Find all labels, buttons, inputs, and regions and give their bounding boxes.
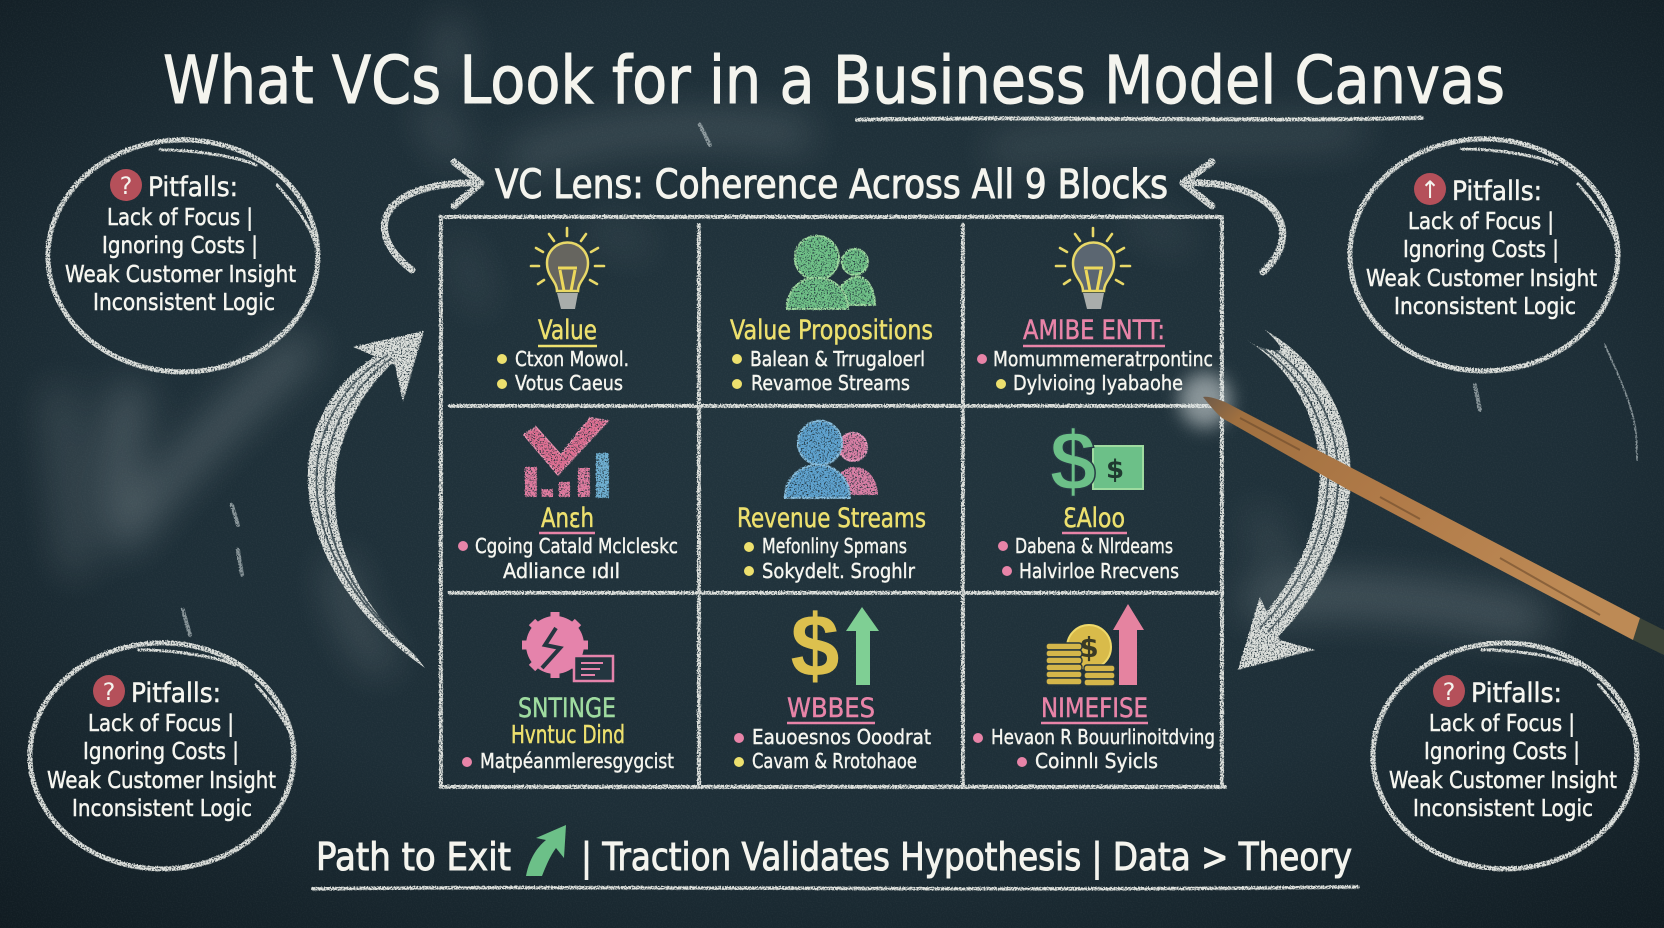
cell: amibe entt bbox=[977, 228, 1213, 395]
icon: coins and pink arrow: $ bbox=[1079, 631, 1099, 664]
callout: pitfalls bottom left bbox=[30, 643, 295, 869]
pitfalls text: Ignoring Costs | bbox=[1403, 237, 1559, 263]
pitfalls text: Ignoring Costs | bbox=[83, 739, 239, 765]
pitfalls text: Lack of Focus | bbox=[88, 711, 234, 737]
icon: up arrow mark bbox=[1414, 173, 1446, 205]
icon: dollar and bill bbox=[1050, 414, 1143, 508]
pitfalls text: Inconsistent Logic bbox=[1394, 294, 1576, 320]
cell: anch bbox=[458, 418, 678, 583]
bullets: Dylvioing Iyabaohe bbox=[1013, 371, 1183, 395]
icon: question mark bbox=[93, 675, 125, 707]
icon: blue and pink people bbox=[785, 421, 878, 498]
bullets bbox=[497, 347, 629, 395]
arrow: top left curved bbox=[385, 162, 481, 270]
bottom tagline: Path to Exit bbox=[316, 835, 511, 879]
pitfalls text: Ignoring Costs | bbox=[102, 233, 258, 259]
bullets: Balean & Trrugaloerl bbox=[750, 347, 925, 371]
icon: question mark: ? bbox=[103, 678, 115, 706]
subtitle: VC Lens: VC Lens: Coherence Across All 9 Blocks bbox=[495, 162, 1168, 208]
pitfalls text: Pitfalls: bbox=[1471, 678, 1562, 709]
bullets: Votus Caeus bbox=[515, 371, 623, 395]
pitfalls text bbox=[1389, 678, 1617, 822]
cell: wbbes bbox=[734, 596, 931, 773]
icon: dollar and green arrow bbox=[791, 596, 879, 695]
bullets: Cgoing Catald Mclcleskc bbox=[475, 534, 678, 558]
callout: pitfalls top left bbox=[48, 140, 318, 372]
pitfalls text: Pitfalls: bbox=[1452, 176, 1542, 207]
pitfalls text: Lack of Focus | bbox=[1429, 711, 1575, 737]
bullets: Revamoe Streams bbox=[751, 371, 910, 395]
bullets: Cavam & Rrotohaoe bbox=[752, 749, 917, 773]
icon: gear with document bbox=[522, 612, 613, 681]
pitfalls text: Weak Customer Insight bbox=[47, 768, 276, 794]
cell: value bbox=[497, 228, 629, 395]
pointer stick bbox=[1179, 372, 1664, 655]
heading: WBBES bbox=[787, 693, 875, 724]
bottom tagline bbox=[313, 825, 1358, 889]
canvas grid lines bbox=[441, 217, 1225, 787]
cell: ealoo bbox=[998, 414, 1179, 583]
pitfalls text bbox=[1366, 176, 1597, 320]
icon: question mark bbox=[1433, 675, 1465, 707]
cell: nimefise bbox=[973, 604, 1215, 773]
callout: pitfalls bottom right bbox=[1373, 643, 1638, 869]
cell: value propositions bbox=[730, 236, 933, 395]
pitfalls text: Weak Customer Insight bbox=[65, 262, 296, 288]
icon: chart with check bbox=[524, 418, 609, 498]
bullets bbox=[732, 347, 925, 395]
icon: question mark: ? bbox=[120, 172, 132, 200]
heading: AMIBE ENTT: bbox=[1023, 315, 1165, 346]
cell: revenue streams bbox=[737, 421, 926, 583]
heading: Anɛh bbox=[541, 503, 594, 534]
heading: SNTINGE bbox=[518, 693, 616, 724]
pitfalls text: Lack of Focus | bbox=[107, 205, 253, 231]
subheading: Hvntuc Dind bbox=[511, 720, 625, 749]
pitfalls text: Inconsistent Logic bbox=[1413, 796, 1593, 822]
pitfalls text: Inconsistent Logic bbox=[72, 796, 252, 822]
pitfalls text: Weak Customer Insight bbox=[1366, 266, 1597, 292]
icon: question mark bbox=[110, 169, 142, 201]
icon: question mark: ? bbox=[1443, 678, 1455, 706]
bullets bbox=[744, 534, 916, 583]
arrow: top right curved bbox=[1183, 162, 1283, 272]
pitfalls text: Lack of Focus | bbox=[1408, 209, 1554, 235]
heading: Value Propositions bbox=[730, 315, 933, 346]
bullets: Ctxon Mowol. bbox=[515, 347, 629, 371]
pitfalls text: Weak Customer Insight bbox=[1389, 768, 1617, 794]
pitfalls text bbox=[47, 678, 276, 822]
bullets: Hevaon R Bouurlinoitdving bbox=[991, 725, 1215, 749]
arrow: large right downward bbox=[1238, 330, 1351, 670]
callout: pitfalls top right bbox=[1350, 139, 1618, 371]
bullets bbox=[998, 534, 1179, 583]
heading: Value bbox=[538, 315, 597, 346]
bullets bbox=[973, 725, 1215, 773]
heading: ƐAloo bbox=[1063, 503, 1125, 534]
arrow: large left upward bbox=[308, 331, 425, 668]
bullets: Eauoesnos Ooodrat bbox=[752, 725, 931, 749]
bullets: Adliance ıdıl bbox=[503, 559, 620, 583]
pitfalls text: Ignoring Costs | bbox=[1424, 739, 1580, 765]
bullets bbox=[458, 534, 678, 583]
bullet: Matpéanmleresgygcist bbox=[480, 749, 674, 773]
heading: NIMEFISE bbox=[1041, 693, 1148, 724]
icon: light bulb bbox=[531, 228, 604, 309]
icon: dollar and bill: $ bbox=[1050, 414, 1096, 508]
bullets bbox=[977, 347, 1213, 395]
title: What VCs Look for in a Business Model Canvas bbox=[163, 42, 1505, 119]
pitfalls text: Pitfalls: bbox=[148, 172, 238, 203]
icon: green people bbox=[787, 236, 875, 309]
bullets: Momummemeratrpontinc bbox=[993, 347, 1213, 371]
bottom tagline: | Traction Validates Hypothesis | Data > Theory bbox=[581, 835, 1352, 880]
bullets: Halvirloe Rrecvens bbox=[1019, 559, 1179, 583]
bullets: Coinnlı Syicls bbox=[1035, 749, 1158, 773]
heading: Revenue Streams bbox=[737, 503, 926, 534]
icon: green arrow bbox=[526, 825, 566, 876]
bullets: Sokydelt. Sroghlr bbox=[762, 559, 916, 583]
icon: dollar and green arrow: $ bbox=[791, 596, 839, 695]
bullets: Mefonliny Spmans bbox=[762, 534, 907, 558]
bullets bbox=[734, 725, 931, 773]
pitfalls text bbox=[65, 172, 296, 316]
pitfalls text: Inconsistent Logic bbox=[93, 290, 275, 316]
icon: up arrow mark: ↑ bbox=[1420, 176, 1440, 204]
icon: dollar and bill: $ bbox=[1106, 455, 1124, 485]
icon: coins and pink arrow bbox=[1046, 604, 1144, 686]
icon: light bulb bbox=[1056, 228, 1130, 309]
cell: sntinge bbox=[462, 612, 674, 773]
bullets: Dabena & Nlrdeams bbox=[1015, 534, 1173, 558]
pitfalls text: Pitfalls: bbox=[131, 678, 221, 709]
